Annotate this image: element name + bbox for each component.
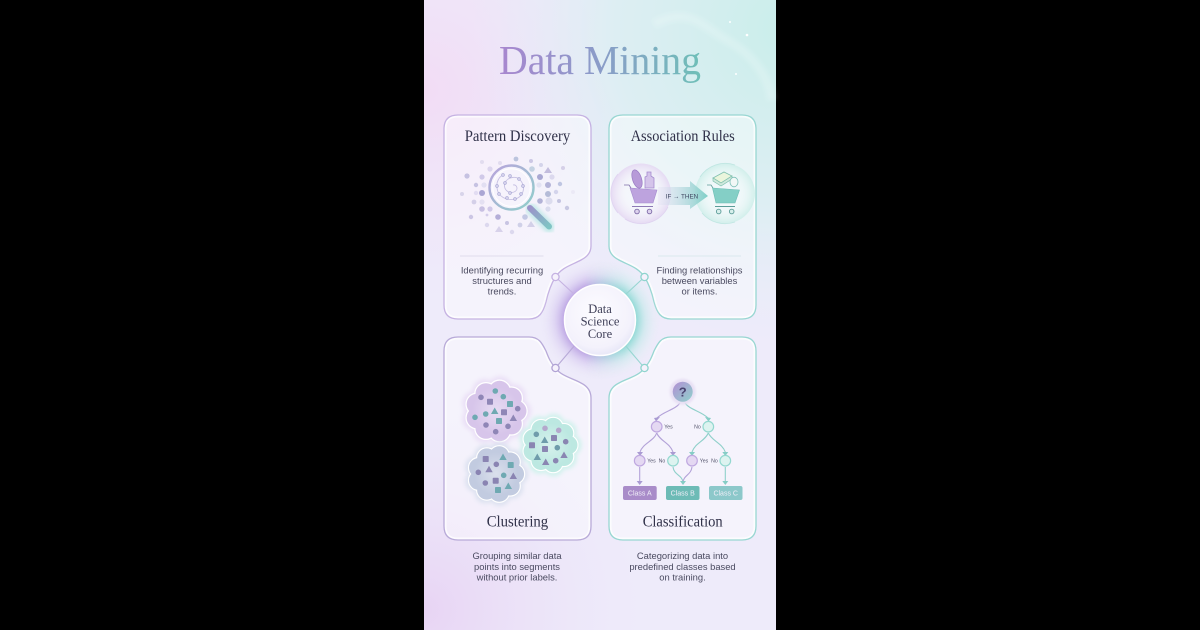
core label: Data <box>588 302 612 316</box>
arrow: if then <box>658 181 708 209</box>
icon: purple cart <box>611 164 671 224</box>
branch labels: No <box>711 458 718 464</box>
divider <box>460 255 544 257</box>
text: classification description: Categorizing data into <box>637 550 728 561</box>
heading: pattern discovery: Pattern Discovery <box>465 128 570 145</box>
branch labels: No <box>694 424 701 430</box>
core label: Core <box>588 327 613 341</box>
text: clustering description: Grouping similar data <box>472 550 562 561</box>
text: pattern discovery description <box>461 264 543 296</box>
text: classification description: on training. <box>659 572 706 582</box>
text: pattern discovery description: trends. <box>488 286 516 296</box>
title: Data Mining <box>499 37 701 83</box>
nodes: teal branches <box>668 421 731 466</box>
chart: decision tree <box>623 379 742 500</box>
icon: scattered data points <box>460 157 575 234</box>
text: clustering description: points into segments <box>474 561 560 572</box>
class boxes <box>623 486 742 500</box>
background panel <box>424 0 776 630</box>
arrow: if then: IF → THEN <box>666 193 699 200</box>
text: clustering description <box>472 550 562 582</box>
text: classification description: predefined classes based <box>629 561 736 572</box>
branch labels: Yes <box>664 424 673 430</box>
panel: pattern discovery <box>444 115 591 319</box>
cluster: blue <box>465 442 528 506</box>
branch labels <box>647 424 718 464</box>
class boxes: Class A <box>628 490 652 498</box>
class boxes: Class B <box>671 490 695 498</box>
connector nodes <box>552 273 648 372</box>
panel: association rules <box>609 115 756 319</box>
panel: clustering <box>444 337 591 540</box>
cluster: purple <box>462 376 531 446</box>
core label: Science <box>581 314 620 328</box>
branch labels: Yes <box>700 458 709 464</box>
branch labels: No <box>659 458 665 464</box>
class boxes: Class C <box>713 490 738 498</box>
icon: magnifying glass <box>490 166 549 227</box>
cluster: teal <box>520 414 582 476</box>
nodes: purple branches <box>634 421 697 466</box>
icon: teal cart <box>695 163 755 224</box>
node: question: ? <box>679 384 687 400</box>
panel: classification <box>609 337 756 540</box>
core: data science core <box>548 268 652 372</box>
text: clustering description: without prior labels. <box>476 572 557 582</box>
text: association rules description: or items. <box>682 286 717 296</box>
text: pattern discovery description: structures and <box>472 275 532 286</box>
text: pattern discovery description: Identifying recurring <box>461 264 543 276</box>
core label <box>581 302 620 341</box>
divider <box>658 255 741 257</box>
connectors <box>556 277 644 368</box>
branch labels: Yes <box>647 458 656 464</box>
heading: association rules: Association Rules <box>631 128 735 145</box>
text: association rules description <box>656 264 743 296</box>
text: association rules description: between variables <box>662 275 738 286</box>
text: association rules description: Finding relationships <box>656 264 743 276</box>
text: classification description <box>629 550 736 582</box>
heading: clustering: Clustering <box>487 514 548 531</box>
heading: classification: Classification <box>643 514 723 531</box>
